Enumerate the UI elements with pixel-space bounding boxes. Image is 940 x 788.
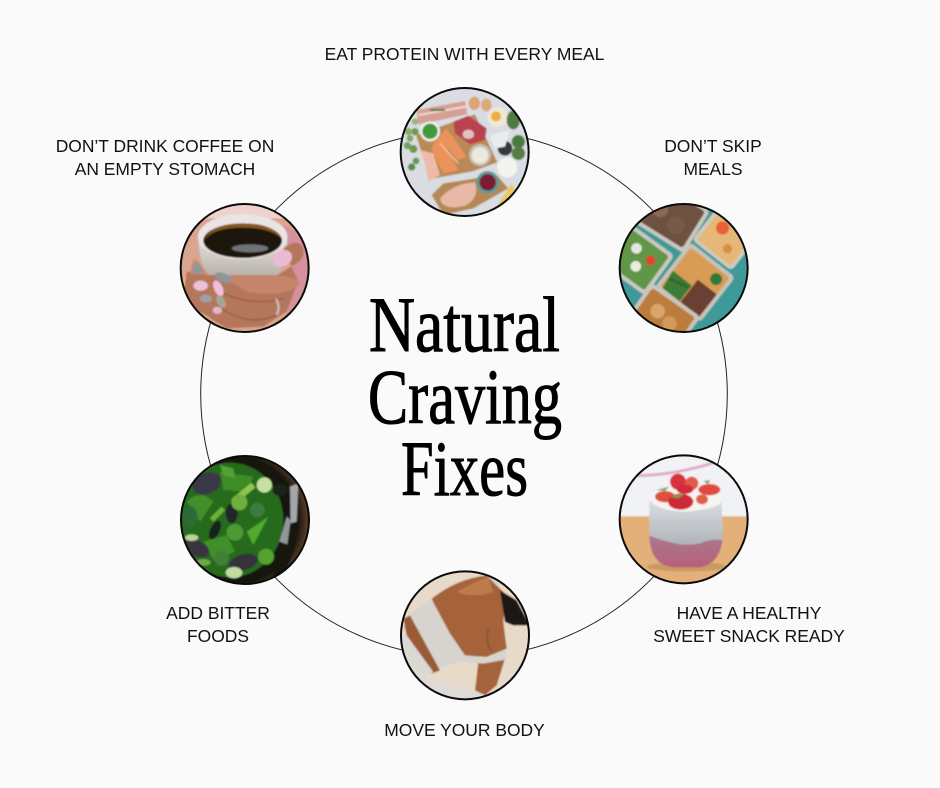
label: don't skip meals: MEALS <box>683 159 743 179</box>
title: Fixes <box>401 425 528 512</box>
photo circle: protein foods <box>400 87 530 217</box>
title: Craving <box>368 353 562 440</box>
photo circle: bitter greens <box>177 455 310 585</box>
photo circle: meal prep trays <box>618 203 749 333</box>
infographic canvas <box>57 48 844 736</box>
label: add bitter foods: ADD BITTER <box>166 603 270 623</box>
label: healthy sweet snack: SWEET SNACK READY <box>653 626 845 646</box>
label: coffee on empty stomach: AN EMPTY STOMACH <box>75 159 255 179</box>
label: don't skip meals: DON’T SKIP <box>664 136 762 156</box>
title: Natural <box>369 281 560 368</box>
label: add bitter foods: FOODS <box>187 626 249 646</box>
title <box>368 281 562 512</box>
label: eat protein: EAT PROTEIN WITH EVERY MEAL <box>325 44 605 64</box>
connecting ring <box>201 131 727 657</box>
photo circle: chia pudding <box>618 454 749 584</box>
label: healthy sweet snack: HAVE A HEALTHY <box>677 603 822 623</box>
label: coffee on empty stomach: DON’T DRINK COFFEE ON <box>56 136 274 156</box>
photo circle: person stretching <box>400 570 530 700</box>
label: move your body: MOVE YOUR BODY <box>384 720 545 740</box>
photo circle: coffee cup in hands <box>180 203 310 333</box>
